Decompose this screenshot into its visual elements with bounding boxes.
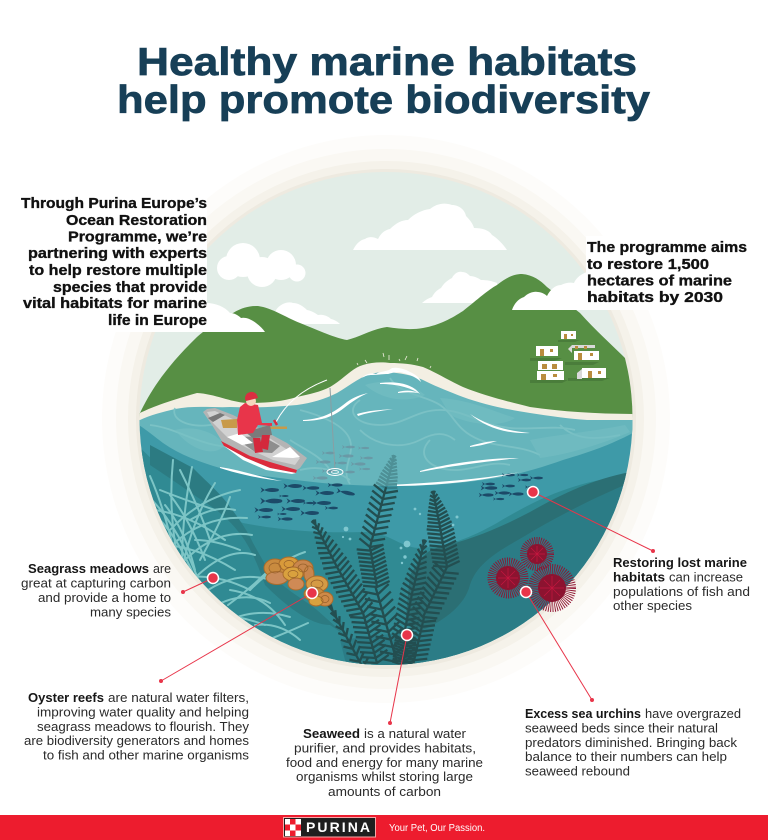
white text box: right aim with cloud <box>512 236 768 310</box>
footer bar <box>0 815 768 840</box>
cloud: behind left hill <box>275 302 340 324</box>
text: sea urchins: seaweed rebound <box>525 764 630 778</box>
boat seat: middle <box>227 433 253 445</box>
urchin: top <box>527 544 547 564</box>
text: seagrass meadows: many species <box>90 604 171 620</box>
text: oyster reefs: seagrass meadows to flourish. They <box>37 719 249 734</box>
text: seagrass meadows: and provide a home to <box>38 590 171 605</box>
boat seat: bow <box>272 447 300 458</box>
white text box: left intro with cloud <box>0 195 265 332</box>
houses <box>530 331 610 383</box>
fish school: right <box>479 473 543 501</box>
text: seagrass meadows: great at capturing carbon <box>21 576 171 591</box>
text: restoring habitats: Restoring lost marine <box>613 555 747 570</box>
oyster reef <box>264 557 333 606</box>
title <box>117 41 651 122</box>
text: restoring habitats: other species <box>613 598 692 613</box>
boat hull <box>203 408 307 472</box>
checkerboard icon <box>285 819 301 836</box>
intro paragraph: vital habitats for marine <box>23 296 207 312</box>
deep water <box>130 420 640 680</box>
cloud: left puffy <box>217 243 306 287</box>
text: oyster reefs: to fish and other marine organisms <box>43 748 249 762</box>
green hills <box>130 274 640 430</box>
beach <box>140 362 632 430</box>
text: restoring habitats: populations of fish and <box>613 584 750 599</box>
surface water <box>130 372 640 486</box>
text: sea urchins: Excess sea urchins <box>525 706 641 721</box>
fishing rod <box>276 380 327 422</box>
intro paragraph: Through Purina Europe’s <box>21 196 207 212</box>
bubbles <box>342 508 458 564</box>
callout: seagrass marker <box>181 572 218 594</box>
urchin: left <box>496 566 520 590</box>
seagrass <box>150 460 308 660</box>
text: seaweed: food and energy for many marine <box>286 755 483 770</box>
fish school: faded under the surface <box>313 445 373 480</box>
text: sea urchins: balance to their numbers can help <box>525 749 727 764</box>
deep water: lower left shadow band <box>150 445 345 635</box>
programme aim paragraph: The programme aims <box>587 240 747 256</box>
surface water light patches <box>175 382 630 458</box>
intro paragraph: partnering with experts <box>28 246 207 262</box>
fisherman jacket <box>237 403 272 435</box>
programme aim paragraph: to restore 1,500 <box>587 257 709 273</box>
fisherman trousers <box>247 426 272 438</box>
purina logo: PURINA <box>306 819 370 835</box>
intro paragraph: Programme, we’re <box>68 230 207 246</box>
fish school: centre <box>254 483 355 521</box>
text: restoring habitats: habitats <box>613 570 665 584</box>
fisherman boots <box>253 435 270 453</box>
circular scene <box>140 172 632 665</box>
text: oyster reefs: Oyster reefs <box>28 690 104 705</box>
deep water: mid layer <box>141 448 626 665</box>
cloud: behind right hill <box>422 272 500 303</box>
text: sea urchins: predators diminished. Bringing back <box>525 735 737 750</box>
text: seaweed: purifier, and provides habitats, <box>294 740 476 756</box>
cloud: top <box>353 204 507 250</box>
halo rings around the scene <box>102 135 670 703</box>
text: restoring habitats <box>613 555 750 613</box>
text: oyster reefs: are natural water filters, <box>108 690 249 705</box>
callout: seaweed marker <box>388 630 412 725</box>
urchin: right <box>538 574 566 602</box>
text: seaweed: amounts of carbon <box>328 784 441 799</box>
boat interior <box>207 411 300 465</box>
surface water caustics <box>150 378 620 484</box>
boat white waterline <box>224 446 296 474</box>
text: seaweed <box>286 726 483 799</box>
callout: oyster marker <box>159 588 318 683</box>
programme aim paragraph <box>587 240 747 306</box>
wooden box <box>221 419 237 428</box>
text: oyster reefs: are biodiversity generators and homes <box>24 733 249 748</box>
boat seat: stern <box>208 413 225 422</box>
text: seagrass meadows: Seagrass meadows <box>28 561 149 576</box>
text: seagrass meadows <box>21 561 171 620</box>
text: seaweed: is a natural water <box>364 726 467 741</box>
sky <box>140 172 624 413</box>
seaweed <box>301 452 460 672</box>
text: sea urchins: seaweed beds since their natural <box>525 720 718 736</box>
boat floor <box>244 436 280 453</box>
boat red stripe <box>221 441 297 473</box>
sea urchins <box>496 544 566 602</box>
purina logo <box>284 818 376 837</box>
text: seagrass meadows: are <box>153 561 171 576</box>
title: help promote biodiversity <box>117 79 651 122</box>
white wave marks <box>220 368 530 486</box>
text: seaweed: Seaweed <box>303 726 360 741</box>
text: oyster reefs: improving water quality and helping <box>37 704 249 720</box>
text: seaweed: organisms whilst storing large <box>296 769 473 784</box>
text: sea urchins: have overgrazed <box>645 706 741 721</box>
intro paragraph: species that provide <box>53 280 207 296</box>
fisherman head <box>246 396 256 406</box>
boat and fisherman <box>203 380 327 474</box>
text: restoring habitats: can increase <box>669 570 743 584</box>
splash marks <box>357 353 431 368</box>
text: oyster reefs <box>24 690 249 762</box>
programme aim paragraph: habitats by 2030 <box>587 290 723 306</box>
fishing line and ripple <box>327 388 343 476</box>
tagline: Your Pet, Our Passion. <box>389 823 485 834</box>
text: sea urchins <box>525 706 741 778</box>
deep water: lower right layer <box>340 486 624 665</box>
programme aim paragraph: hectares of marine <box>587 274 732 290</box>
deep water: right dark ridge <box>405 472 632 630</box>
wooden stick <box>262 426 287 429</box>
intro paragraph: life in Europe <box>108 313 207 329</box>
intro paragraph: Ocean Restoration <box>66 213 207 229</box>
intro paragraph: to help restore multiple <box>29 263 207 279</box>
intro paragraph <box>21 196 207 329</box>
callout: urchin marker <box>520 586 594 702</box>
callout: restoring marker <box>528 486 655 553</box>
title: Healthy marine habitats <box>137 41 637 84</box>
water foreground clipped to the disc <box>203 353 530 486</box>
